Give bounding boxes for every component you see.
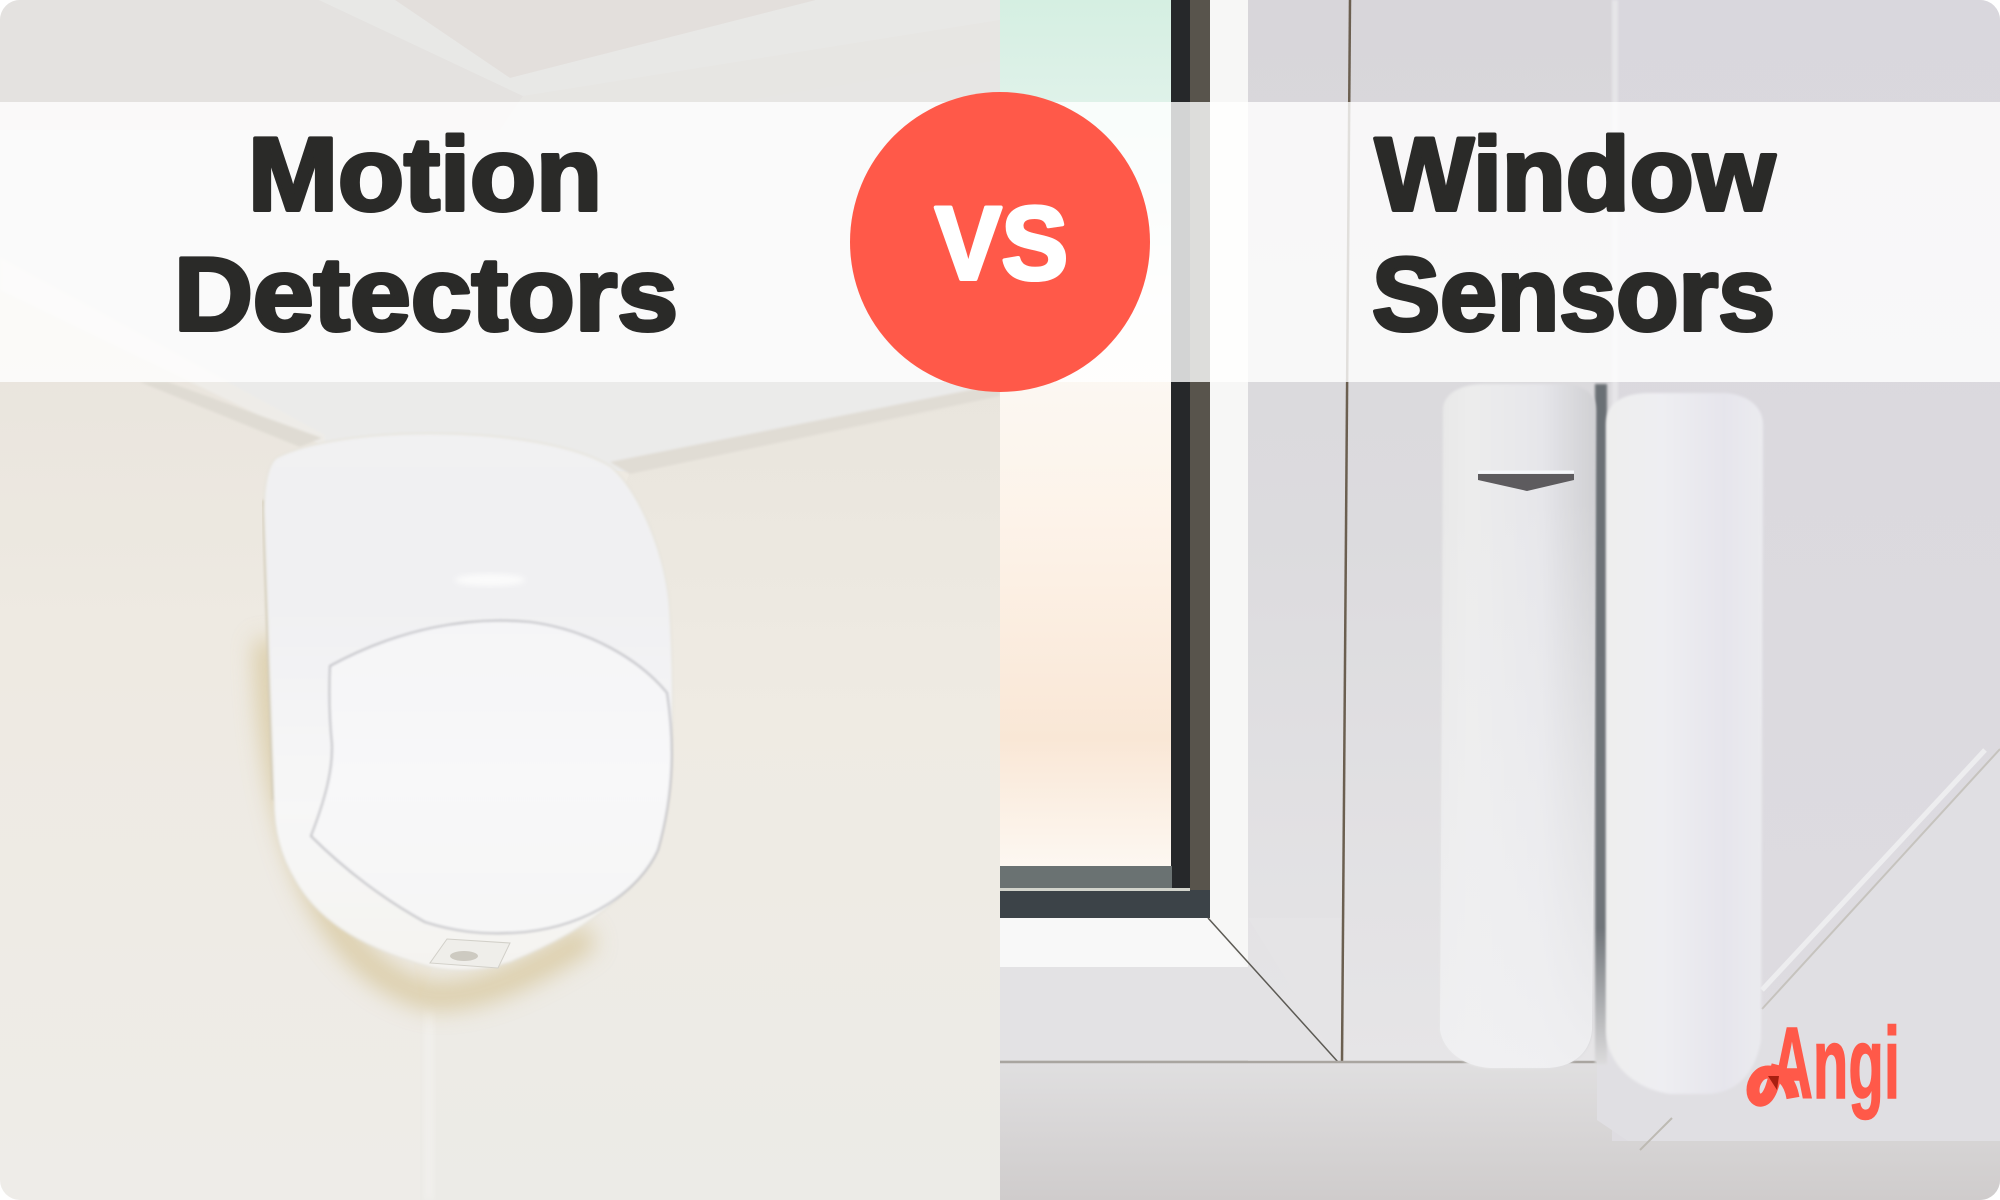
wall base xyxy=(414,962,432,999)
logo wordmark: Angi xyxy=(1771,1008,1900,1120)
vs badge xyxy=(850,92,1150,392)
heading line: Detectors: Detectors xyxy=(174,237,678,353)
badge circle xyxy=(850,92,1150,392)
icon: contact sensor right xyxy=(1606,393,1763,1094)
detector tab xyxy=(430,939,510,968)
heading: motion detectors xyxy=(179,132,676,333)
sensor shadow xyxy=(268,640,590,996)
floor xyxy=(1000,1145,2000,1200)
dome highlight xyxy=(462,576,518,584)
ceiling xyxy=(0,0,1000,520)
sensor body left xyxy=(1440,384,1596,1068)
heading line: Window: Window xyxy=(1375,117,1776,233)
right backdrop xyxy=(1000,0,2000,1200)
window frame stiles xyxy=(1210,0,2000,1141)
icon: contact sensor left xyxy=(1440,384,1596,1068)
detector housing edge xyxy=(264,500,274,800)
left wall xyxy=(0,382,420,1200)
detector housing xyxy=(264,433,673,970)
wall corner xyxy=(424,1010,434,1200)
window glass xyxy=(1000,0,1172,870)
lower right frame corner xyxy=(1597,749,2000,1150)
sensor body left lower highlight xyxy=(1440,597,1595,1068)
detector lens xyxy=(311,621,672,933)
heading: window sensors xyxy=(1373,132,1778,333)
logo: Angi xyxy=(1753,1008,1900,1120)
logo loop xyxy=(1753,1065,1793,1100)
logo fold xyxy=(1768,1076,1779,1090)
panel: window sensor photo xyxy=(1000,0,2000,1200)
window frame dark seal xyxy=(1000,0,1210,918)
sensor slit xyxy=(1478,472,1574,491)
panel: motion detector photo xyxy=(0,0,1000,1200)
crown molding xyxy=(148,382,998,473)
frame seams xyxy=(1000,0,1618,1062)
sensor body right xyxy=(1606,393,1763,1094)
badge label: VS xyxy=(935,186,1068,302)
icon: motion detector xyxy=(264,433,673,970)
logo knockout xyxy=(1755,1076,1785,1104)
sensor gap shadow xyxy=(1595,384,1607,1064)
heading line: Sensors: Sensors xyxy=(1372,237,1775,353)
window sill xyxy=(1000,918,1346,1062)
right wall xyxy=(420,388,1000,1200)
text band xyxy=(0,102,2000,382)
heading line: Motion: Motion xyxy=(248,117,602,233)
